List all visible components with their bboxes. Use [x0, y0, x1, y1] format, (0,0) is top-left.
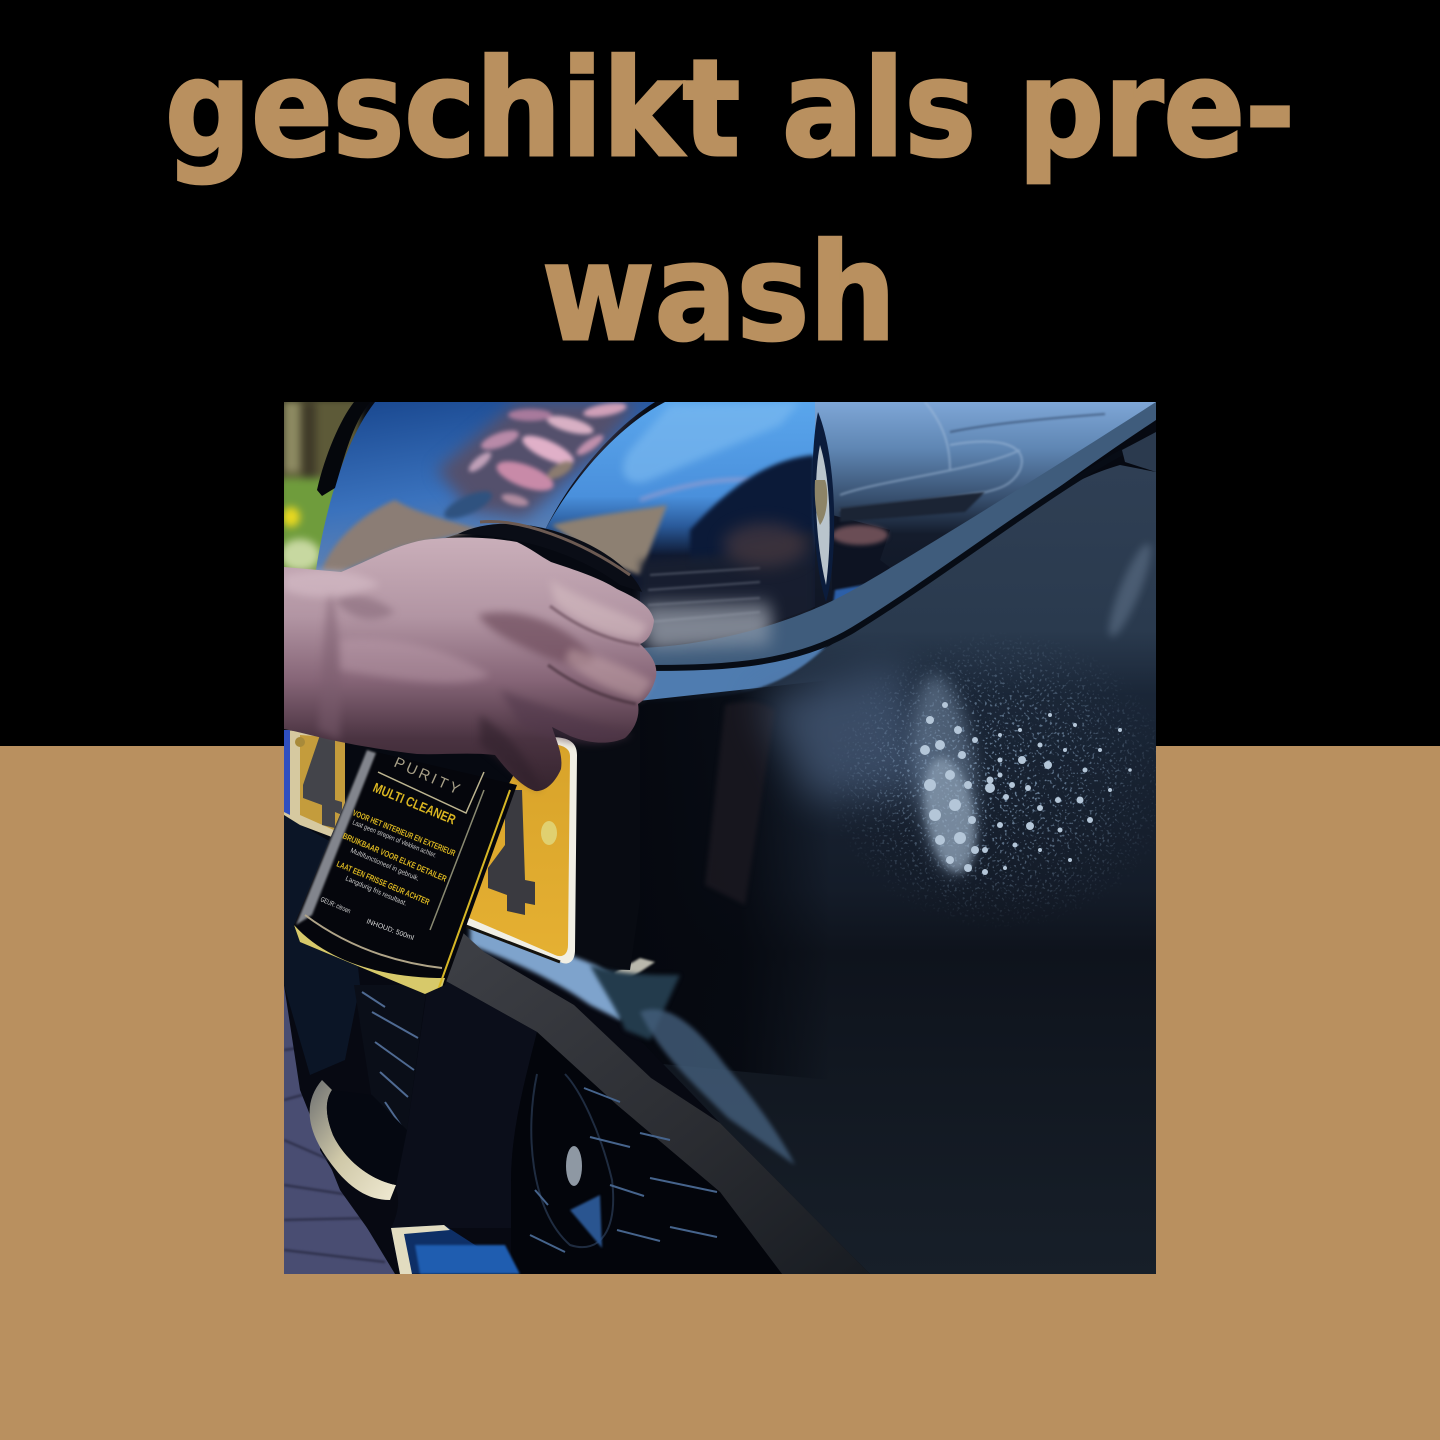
bottle cap: [458, 522, 642, 592]
headlight left section: [545, 402, 830, 652]
headlight right section: [815, 402, 1156, 615]
bottle label text: Multifunctioneel in gebruik.: [349, 847, 420, 883]
bottle liquid base: [294, 790, 510, 996]
bottle label text: VOOR HET INTERIEUR EN EXTERIEUR: [351, 808, 457, 858]
bottle label text: [319, 754, 465, 942]
fender dark left shade: [632, 683, 804, 1075]
headlight reflections: [552, 402, 815, 650]
licence plate right part: [460, 737, 577, 964]
bottle label box: [378, 772, 484, 813]
grey arch strip: [444, 930, 870, 1274]
fine droplets on fender: [825, 630, 1156, 930]
garden background: [278, 398, 360, 583]
photographer reflection: [832, 492, 985, 612]
hand: [284, 538, 656, 791]
light bumper edge strip: [643, 646, 829, 700]
fog lamp: [566, 1146, 582, 1186]
left body under plate: [284, 815, 360, 1075]
hand shading and veins: [284, 571, 652, 790]
bottle label text: GEUR: citroen: [319, 896, 351, 915]
right grille honeycomb: [511, 1032, 782, 1274]
black centre pillar: [447, 982, 537, 1032]
car hood with reflections: [316, 400, 655, 572]
background: tan lower band: [0, 746, 1440, 1440]
bottle label text: MULTI CLEANER: [371, 780, 458, 828]
bottle label text: LAAT EEN FRISSE GEUR ACHTER: [335, 859, 431, 907]
bottle label text: BRUIKBAAR VOOR ELKE DETAILER: [341, 831, 448, 884]
foam patch: [905, 540, 1158, 878]
headlight trim strip: [640, 402, 1156, 668]
title: wash: [542, 215, 896, 371]
bottle left highlight: [296, 750, 376, 925]
headlight trim dark line: [655, 478, 1084, 671]
wiper / mirror arm: [317, 402, 370, 496]
left grille: [354, 985, 418, 1125]
lower front bumper: [284, 986, 720, 1229]
blue reflection on arch: [470, 925, 630, 1020]
black bumper beside plate: [575, 740, 632, 970]
headlight right inner reflections: [840, 402, 1105, 510]
title: [165, 31, 1295, 371]
photo: hand spraying multi cleaner on car: [278, 398, 1158, 1274]
bottle label text: INHOUD: 500ml: [365, 918, 415, 942]
bottle: [294, 750, 517, 996]
fog lamp blue glint: [570, 1195, 602, 1248]
spray mist: [640, 610, 940, 800]
licence plate left part: [284, 730, 345, 842]
bottle label text: Laat geen strepen of vlekken achter.: [351, 819, 437, 860]
fender dark reflection: [705, 702, 775, 905]
debris speck on panel: [614, 956, 656, 976]
pavement: [284, 985, 395, 1274]
background: black upper band: [0, 0, 1440, 746]
headlight chrome lens: [812, 412, 834, 602]
upper chrome trim: [310, 1080, 396, 1200]
lower chrome trim: [391, 1225, 520, 1274]
bottle label text: Langdurig fris resultaat.: [344, 875, 408, 908]
title: geschikt als pre-: [165, 31, 1295, 187]
fender panel: [560, 465, 1156, 1274]
foam bubbles: [920, 702, 1132, 875]
chrome trim inner dark: [327, 1090, 407, 1185]
corner panel: [1122, 432, 1156, 472]
blue building reflection: [640, 1009, 795, 1165]
photo base: car dark body: [284, 402, 1156, 1274]
bottle label text: PURITY: [391, 754, 465, 799]
teal panel reflection: [590, 965, 680, 1040]
